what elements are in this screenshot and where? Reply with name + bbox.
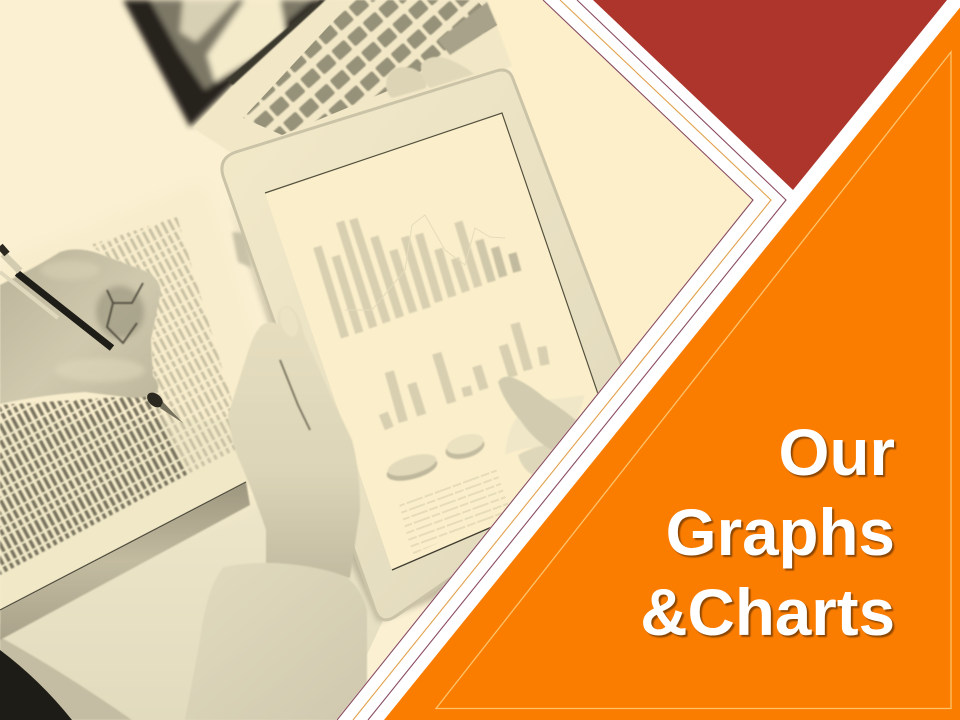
thumb crease — [280, 360, 310, 430]
tablet screen — [265, 113, 624, 570]
orange triangle — [384, 5, 960, 720]
frame lines: purple and orange chevrons — [337, 0, 786, 720]
screen top edge — [264, 112, 598, 394]
screen bottom edge — [392, 526, 491, 571]
cream wall upper right — [488, 0, 752, 370]
pen nib — [160, 402, 183, 423]
pie chart right — [445, 434, 485, 460]
table lower area — [3, 502, 382, 720]
holding hand — [228, 305, 360, 578]
pen clip — [0, 272, 58, 318]
book page — [0, 180, 300, 612]
laptop — [123, 0, 512, 165]
finger creases — [107, 283, 143, 343]
open book — [0, 216, 250, 640]
pie chart left — [386, 454, 438, 482]
pen barrel — [17, 273, 112, 348]
screen paragraph text — [398, 466, 510, 555]
trend line — [345, 215, 505, 310]
title: &Charts — [640, 576, 895, 649]
bar chart lower — [383, 323, 545, 428]
title: Graphs — [666, 496, 895, 569]
title — [640, 416, 897, 649]
book spine band — [0, 482, 250, 640]
hand shading — [40, 260, 145, 382]
fingertips over tablet top — [386, 57, 474, 98]
sleeve — [185, 563, 367, 720]
bar chart upper — [317, 219, 517, 337]
writing hand — [0, 246, 183, 423]
red triangle — [593, 0, 947, 190]
book text, faint — [90, 217, 245, 473]
inner purple chevron — [368, 0, 786, 720]
inner triangle outline — [436, 52, 951, 708]
tablet — [222, 70, 650, 622]
laptop hinge dark strip — [226, 0, 326, 86]
keyboard — [243, 0, 497, 135]
outer purple chevron — [337, 0, 753, 720]
pointing hand — [498, 377, 585, 476]
orange chevron — [353, 0, 771, 720]
keyboard side bar — [438, 2, 497, 55]
pen end cap — [0, 246, 7, 254]
pen tip collar — [147, 392, 163, 408]
tablet frame — [222, 70, 650, 620]
tablet shadow — [235, 221, 466, 623]
laptop screen — [123, 0, 326, 127]
fingers behind tablet — [232, 232, 252, 268]
thumb nail — [277, 305, 301, 339]
table rim and dark floor — [0, 637, 132, 720]
pen silver section — [3, 254, 20, 271]
book text, dark — [0, 395, 190, 575]
title: Our — [779, 416, 895, 489]
laptop body — [193, 0, 512, 165]
panel: sepia photo of hands with tablet — [0, 0, 752, 720]
